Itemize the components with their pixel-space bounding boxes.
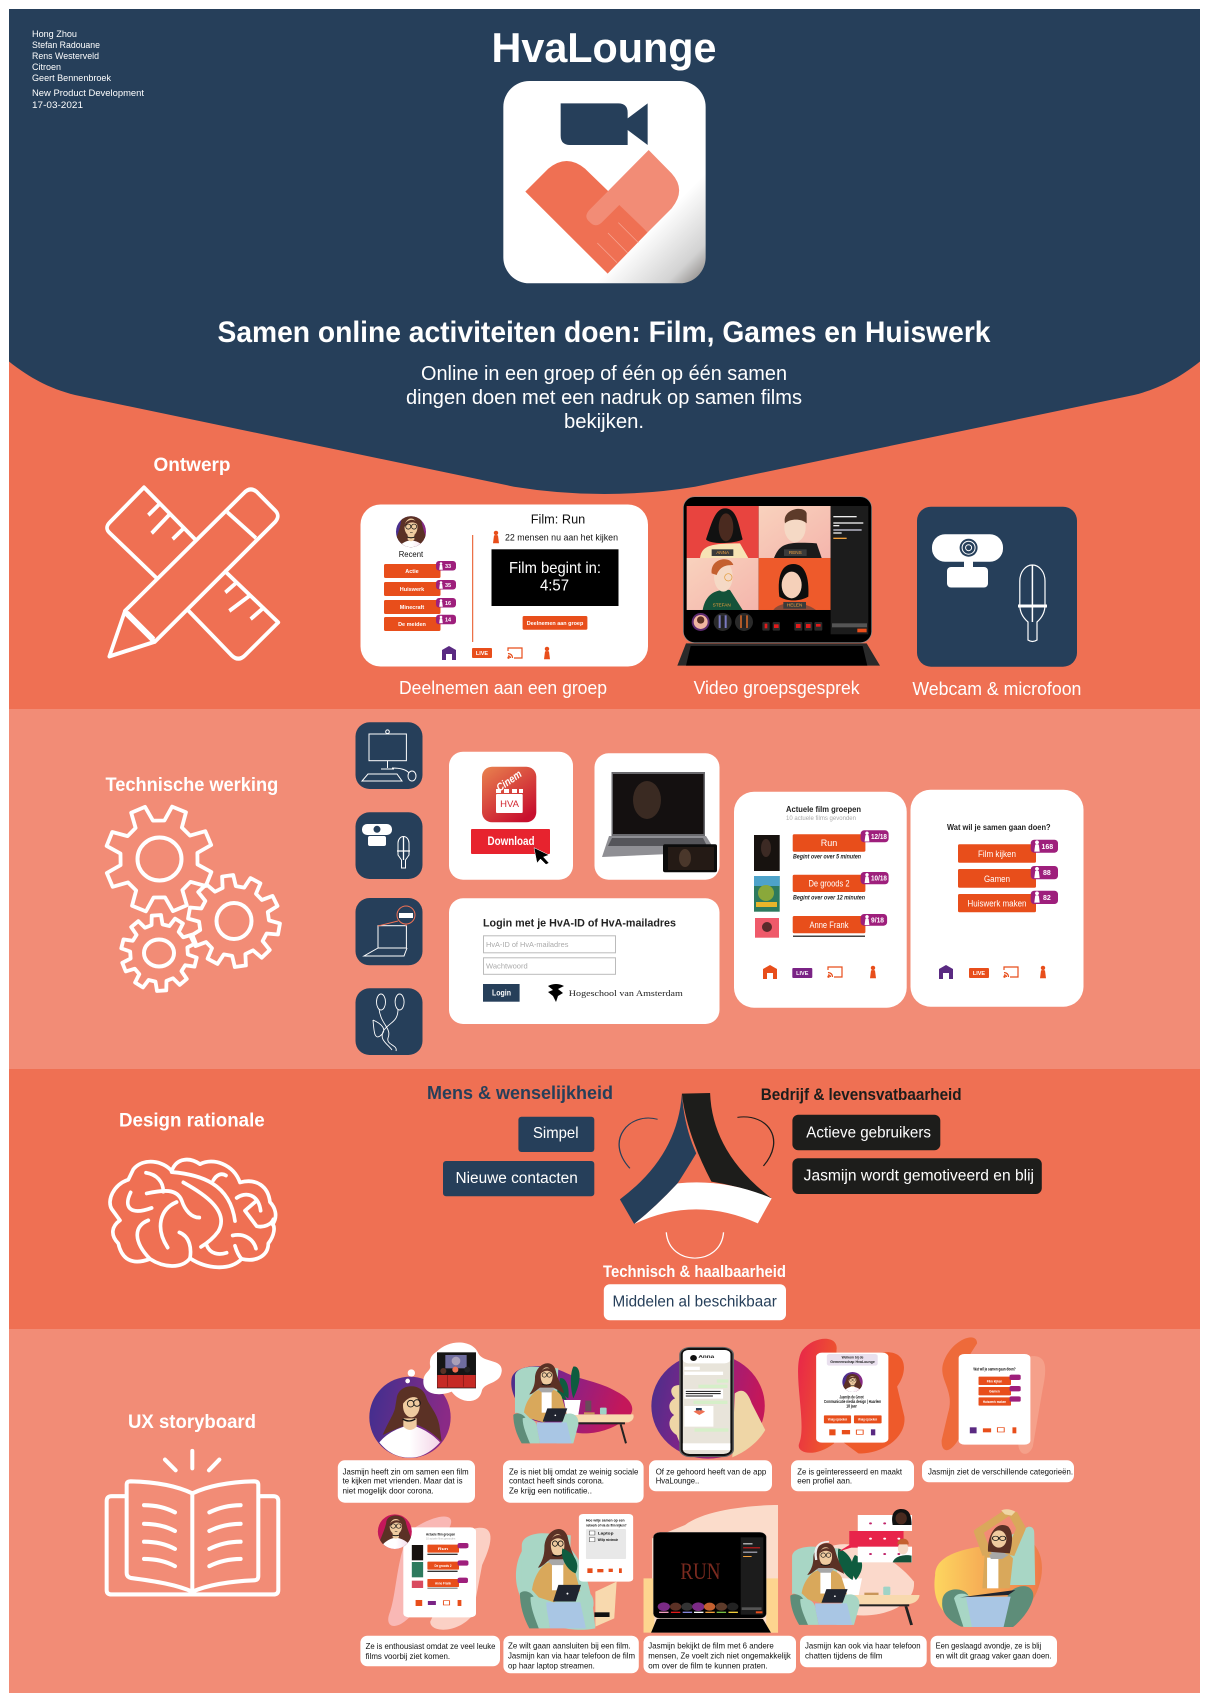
email field: HvA-ID of HvA-mailadres [486, 940, 569, 949]
panel: join group card [360, 504, 648, 666]
scene 5: category screen: Gamen [989, 1389, 1000, 1394]
scene 7: streaming via phone: Willip minimale [598, 1538, 619, 1542]
scene 7: streaming via phone: netwerk of via de film kijken? [586, 1523, 627, 1527]
tag: Actieve gebruikers [792, 1115, 940, 1150]
group list: Minecraft [400, 605, 424, 611]
participant stefan [703, 559, 743, 610]
captions: storyboard row 1: Ze is niet blij omdat ze weinig sociale [509, 1466, 639, 1476]
panel: join group card: Film: Run [531, 512, 585, 526]
heading: Technische werking: Technische werking [106, 775, 278, 796]
captions: design row [399, 677, 1081, 699]
film buttons: Run [821, 838, 837, 848]
authors: Geert Bennenbroek [32, 73, 111, 84]
scene 5: category screen: Wat wil je samen gaan doen? [973, 1367, 1016, 1372]
email field [484, 936, 616, 953]
scene 4: profile screen: 18 jaar [846, 1404, 857, 1409]
activity buttons: Huiswerk maken [968, 898, 1026, 908]
panel: video call tablet [677, 497, 880, 666]
icon: webcam small [356, 812, 422, 879]
login button: Login [492, 988, 511, 998]
countdown [492, 549, 618, 606]
icon: pencil and ruler [107, 487, 278, 659]
scene 8: watching RUN on tablet: RUN [680, 1559, 720, 1585]
authors: New Product Development [32, 88, 144, 99]
captions: design row: Deelnemen aan een groep [399, 677, 607, 698]
authors: Citroen [32, 62, 61, 73]
participant rens [774, 509, 822, 558]
film badges: 9/18 [871, 918, 884, 924]
captions: storyboard row 2: mensen, Ze voelt zich niet ongemakkelijk [648, 1650, 791, 1660]
password field [484, 958, 616, 974]
logo: Hogeschool van Amsterdam [548, 984, 683, 1002]
authors [32, 29, 144, 111]
nav bar [442, 646, 550, 660]
panel: join group card: 22 mensen nu aan het kijken [505, 532, 618, 544]
group list [384, 561, 456, 631]
scene 8: watching RUN on tablet [644, 1505, 778, 1633]
scene 4: profile screen: Vraag opzoeken [828, 1417, 847, 1422]
activity buttons: Film kijken [978, 849, 1016, 859]
captions: storyboard row 2: om over de film te kunnen praten. [648, 1660, 768, 1670]
activity buttons [958, 844, 1036, 912]
subtitle [406, 363, 802, 433]
scene 7: streaming via phone: Hoe wilje samen op een [586, 1518, 625, 1522]
password field: Wachtwoord [486, 962, 528, 970]
title: HvaLounge [492, 24, 716, 71]
film start times: Begint over over 12 minuten [793, 894, 865, 902]
scene 4: profile screen: Gemeenschap HvaLounge [830, 1360, 875, 1365]
participant helen: HELEN [787, 603, 802, 608]
scene 6: film list screen: 10 actuele films gevonden [426, 1537, 455, 1540]
scene 5: category screen [942, 1337, 1045, 1454]
group list: Huiswerk [400, 587, 425, 593]
captions: storyboard row 1: HvaLounge.. [656, 1476, 699, 1486]
authors: Rens Westerveld [32, 51, 99, 62]
activity badges: 82 [1043, 895, 1051, 902]
subtitle: dingen doen met een nadruk op samen films [406, 387, 802, 409]
group list: 14 [445, 618, 452, 624]
icon: computer [356, 722, 422, 789]
scene 6: film list screen [378, 1514, 491, 1630]
activity badges: 168 [1042, 844, 1053, 851]
scene 9: chatting by phone [790, 1509, 920, 1625]
group list: 16 [445, 601, 451, 607]
authors: Hong Zhou [32, 29, 77, 40]
captions: storyboard row 2: Ze wilt gaan aansluiten bij een film. [508, 1640, 631, 1650]
tag: Actieve gebruikers: Actieve gebruikers [806, 1125, 931, 1142]
tag: Middelen al beschikbaar [604, 1284, 786, 1320]
captions: storyboard row 1: te kijken met vrienden. Maar dat is [343, 1476, 463, 1486]
captions: storyboard row 1: Of ze gehoord heeft van de app [656, 1466, 766, 1476]
participant helen [773, 564, 816, 610]
join button: Deelnemen aan groep [527, 621, 584, 627]
panel: webcam and microphone [917, 507, 1077, 667]
participant stefan: STEFAN [713, 603, 731, 608]
film start times [793, 854, 865, 937]
film badges: 12/18 [871, 834, 887, 841]
film buttons: Anne Frank [810, 920, 849, 930]
nav bar [763, 965, 876, 979]
scene 4: profile screen: Jasmijn de Groot [839, 1395, 864, 1400]
scene 6: film list screen: Actuele film groepen [426, 1532, 455, 1537]
download button: Download [488, 834, 534, 848]
authors: 17-03-2021 [32, 100, 83, 111]
app icon [482, 767, 536, 822]
panel: film groups card [734, 792, 907, 1008]
captions: storyboard row 1 [338, 1460, 1074, 1503]
film posters [754, 835, 780, 938]
participant anna [700, 508, 748, 558]
activity badges [1031, 840, 1058, 904]
captions: design row: Webcam & microfoon [912, 678, 1081, 699]
captions: storyboard row 2: films voorbij ziet komen. [366, 1651, 450, 1661]
icon: app logo [503, 81, 706, 283]
tag: Middelen al beschikbaar: Middelen al beschikbaar [612, 1294, 777, 1311]
heading: Ontwerp: Ontwerp [154, 455, 230, 476]
group list: Actie [405, 569, 419, 575]
subtitle: bekijken. [564, 411, 644, 433]
captions: storyboard row 1: Jasmijn ziet de verschillende categorieën. [928, 1466, 1073, 1476]
activity badges: 88 [1043, 870, 1051, 877]
tag: Jasmijn wordt gemotiveerd en blij: Jasmijn wordt gemotiveerd en blij [804, 1168, 1034, 1185]
captions: storyboard row 1: een profiel aan. [797, 1476, 852, 1486]
scene 4: profile screen: Vraag opzoeken [858, 1417, 877, 1422]
panel: film groups card: 10 actuele films gevonden [786, 816, 856, 822]
scene 3: phone with chat: Anna [698, 1355, 715, 1360]
captions: storyboard row 2: en wilt dit graag vaker gaan doen. [936, 1650, 1052, 1660]
icon: earphones [356, 988, 422, 1055]
participant rens: RENS [789, 550, 802, 555]
tag: Nieuwe contacten [443, 1161, 594, 1196]
icon: laptop with camera detail [356, 898, 422, 965]
authors: Stefan Radouane [32, 40, 100, 51]
tag: Simpel: Simpel [533, 1125, 578, 1142]
film badges: 10/18 [871, 876, 887, 882]
nav bar: LIVE [796, 971, 809, 977]
chat panel [831, 506, 868, 634]
captions: storyboard row 1: Jasmijn heeft zin om samen een film [343, 1466, 469, 1476]
scene 7: streaming via phone: Laptop [598, 1531, 614, 1535]
scene 6: film list screen: De groods 2 [434, 1564, 452, 1568]
scene 10: stretching happily [934, 1509, 1042, 1627]
scene 1: Jasmijn with thought cloud [369, 1342, 502, 1458]
panel: activity choice card: Wat wil je samen gaan doen? [947, 822, 1051, 832]
subtitle: Online in een groep of één op één samen [421, 363, 787, 385]
scene 2: Jasmijn on chair [511, 1363, 634, 1443]
panel: login card: Login met je HvA-ID of HvA-mailadres [483, 918, 676, 930]
scene 4: profile screen: Welkom bij de [842, 1355, 864, 1360]
icon: gears [89, 789, 287, 998]
captions: storyboard row 1: Ze is geïnteresseerd en maakt [797, 1466, 903, 1476]
panel: activity choice card [910, 790, 1084, 1007]
scene 5: category screen: Film kijken [987, 1379, 1002, 1384]
heading: Bedrijf & levensvatbaarheid: Bedrijf & levensvatbaarheid [761, 1086, 962, 1104]
headline: Samen online activiteiten doen: Film, Games en Huiswerk [218, 316, 991, 349]
scene 5: category screen: Huiswerk maken [983, 1400, 1006, 1405]
film buttons [793, 834, 865, 933]
panel: join group card: Recent [399, 549, 424, 559]
activity buttons: Gamen [984, 874, 1010, 884]
chart: triad diagram [619, 1093, 774, 1258]
captions: storyboard row 1: contact heeft sinds corona. [509, 1476, 604, 1486]
captions: storyboard row 2: Ze is enthousiast omdat ze veel leuke [366, 1641, 496, 1651]
film buttons: De groods 2 [808, 878, 850, 888]
panel: laptop streaming card [594, 753, 720, 880]
login button [483, 984, 520, 1002]
scene 3: phone with chat [651, 1347, 765, 1459]
scene 6: film list screen: Run [438, 1547, 448, 1551]
film start times: Begint over over 5 minuten [793, 854, 861, 860]
panel: download card [449, 752, 573, 880]
cursor [534, 848, 549, 864]
captions: storyboard row 2: chatten tijdens de film [805, 1650, 882, 1660]
app icon: Cinem [494, 768, 524, 794]
icon: brain [110, 1160, 276, 1267]
captions: storyboard row 2: Een geslaagd avondje, ze is blij [936, 1640, 1041, 1650]
scene 4: profile screen: Communicatie media design | Haarlem [824, 1400, 881, 1405]
tag: Nieuwe contacten: Nieuwe contacten [456, 1170, 578, 1187]
header panel [9, 9, 1200, 494]
tag: Jasmijn wordt gemotiveerd en blij [792, 1158, 1042, 1194]
scene 6: film list screen: Anne Frank [435, 1581, 451, 1585]
countdown: Film begint in: [509, 560, 601, 577]
countdown: 4:57 [540, 578, 569, 595]
logo: Hogeschool van Amsterdam: Hogeschool van Amsterdam [569, 988, 683, 998]
panel: login card [449, 898, 720, 1024]
heading: Mens & wenselijkheid: Mens & wenselijkheid [427, 1082, 613, 1103]
nav bar: LIVE [476, 651, 488, 657]
app icon: HVA [500, 799, 520, 810]
tag: Simpel [518, 1117, 594, 1152]
captions: storyboard row 2: Jasmijn bekijkt de film met 6 andere [648, 1640, 774, 1650]
icon: open book [107, 1451, 278, 1594]
group list: 33 [445, 564, 451, 570]
join button [523, 616, 587, 630]
panel: film groups card: Actuele film groepen [786, 804, 861, 814]
nav bar [939, 965, 1046, 979]
scene 7: streaming via phone [516, 1514, 633, 1630]
heading: Technisch & haalbaarheid: Technisch & haalbaarheid [603, 1263, 786, 1281]
captions: storyboard row 2: op haar laptop streamen. [508, 1660, 595, 1670]
captions: storyboard row 1: Ze krijg een notificatie.. [509, 1485, 592, 1495]
group list: De meiden [398, 622, 427, 628]
captions: design row: Video groepsgesprek [694, 677, 860, 698]
film badges [861, 830, 889, 926]
captions: storyboard row 2: Jasmijn kan via haar telefoon de film [508, 1650, 635, 1660]
avatar [396, 516, 426, 548]
participant anna: ANNA [716, 550, 730, 555]
captions: storyboard row 2: Jasmijn kan ook via haar telefoon [805, 1640, 921, 1650]
call controls [692, 613, 822, 631]
captions: storyboard row 2 [360, 1636, 1057, 1673]
group list: 35 [445, 583, 451, 589]
scene 4: profile screen [798, 1339, 905, 1453]
heading: Design rationale: Design rationale [119, 1110, 265, 1132]
nav bar: LIVE [973, 971, 985, 977]
heading: UX storyboard: UX storyboard [128, 1411, 256, 1433]
captions: storyboard row 1: niet mogelijk door corona. [343, 1485, 434, 1495]
